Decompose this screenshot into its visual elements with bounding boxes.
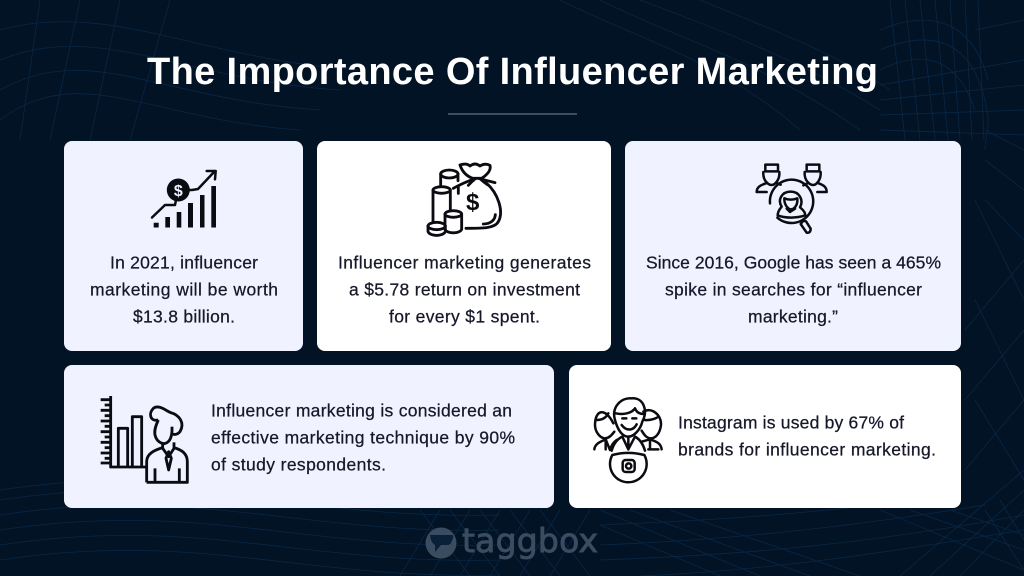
text: instagram usage: Instagram is used by 67% of (678, 412, 904, 432)
text: market worth: In 2021, influencer (110, 252, 258, 272)
text: effective technique: effective marketing technique by 90% (211, 428, 515, 448)
icon: analyst with bar chart (101, 396, 187, 482)
text: market worth (90, 252, 278, 326)
text: effective technique: of study respondents. (211, 454, 386, 474)
logo: taggbox: taggbox (462, 521, 598, 560)
panel: instagram usage (569, 365, 961, 508)
text: search spike: marketing.” (748, 306, 838, 326)
text: market worth: marketing will be worth (90, 280, 278, 300)
text: return on investment: for every $1 spent. (389, 306, 540, 326)
text: effective technique: Influencer marketing is considered an (211, 400, 512, 420)
text: effective technique (211, 400, 515, 474)
icon: money bag and coins: $ (466, 189, 479, 216)
text: search spike: Since 2016, Google has seen a 465% (646, 252, 941, 272)
text: return on investment: Influencer marketing generates (338, 252, 591, 272)
text: market worth: $13.8 billion. (133, 306, 235, 326)
text: instagram usage: brands for influencer marketing. (678, 440, 936, 460)
text: search spike: spike in searches for “influencer (665, 280, 922, 300)
panel: search spike (625, 141, 961, 351)
panel: effective technique (64, 365, 554, 508)
title: The Importance Of Influencer Marketing (147, 51, 878, 93)
panel: return on investment (317, 141, 611, 351)
text: search spike (646, 252, 941, 326)
icon: influencers with instagram badge (594, 398, 662, 482)
icon: magnifier over people (757, 165, 827, 233)
icon: dollar growth chart (152, 171, 216, 228)
icon: money bag and coins (428, 164, 501, 235)
icon: dollar growth chart: $ (174, 183, 183, 200)
text: return on investment (338, 252, 591, 326)
panel: market worth (64, 141, 303, 351)
text: return on investment: a $5.78 return on investment (349, 280, 580, 300)
text: instagram usage (678, 412, 936, 460)
